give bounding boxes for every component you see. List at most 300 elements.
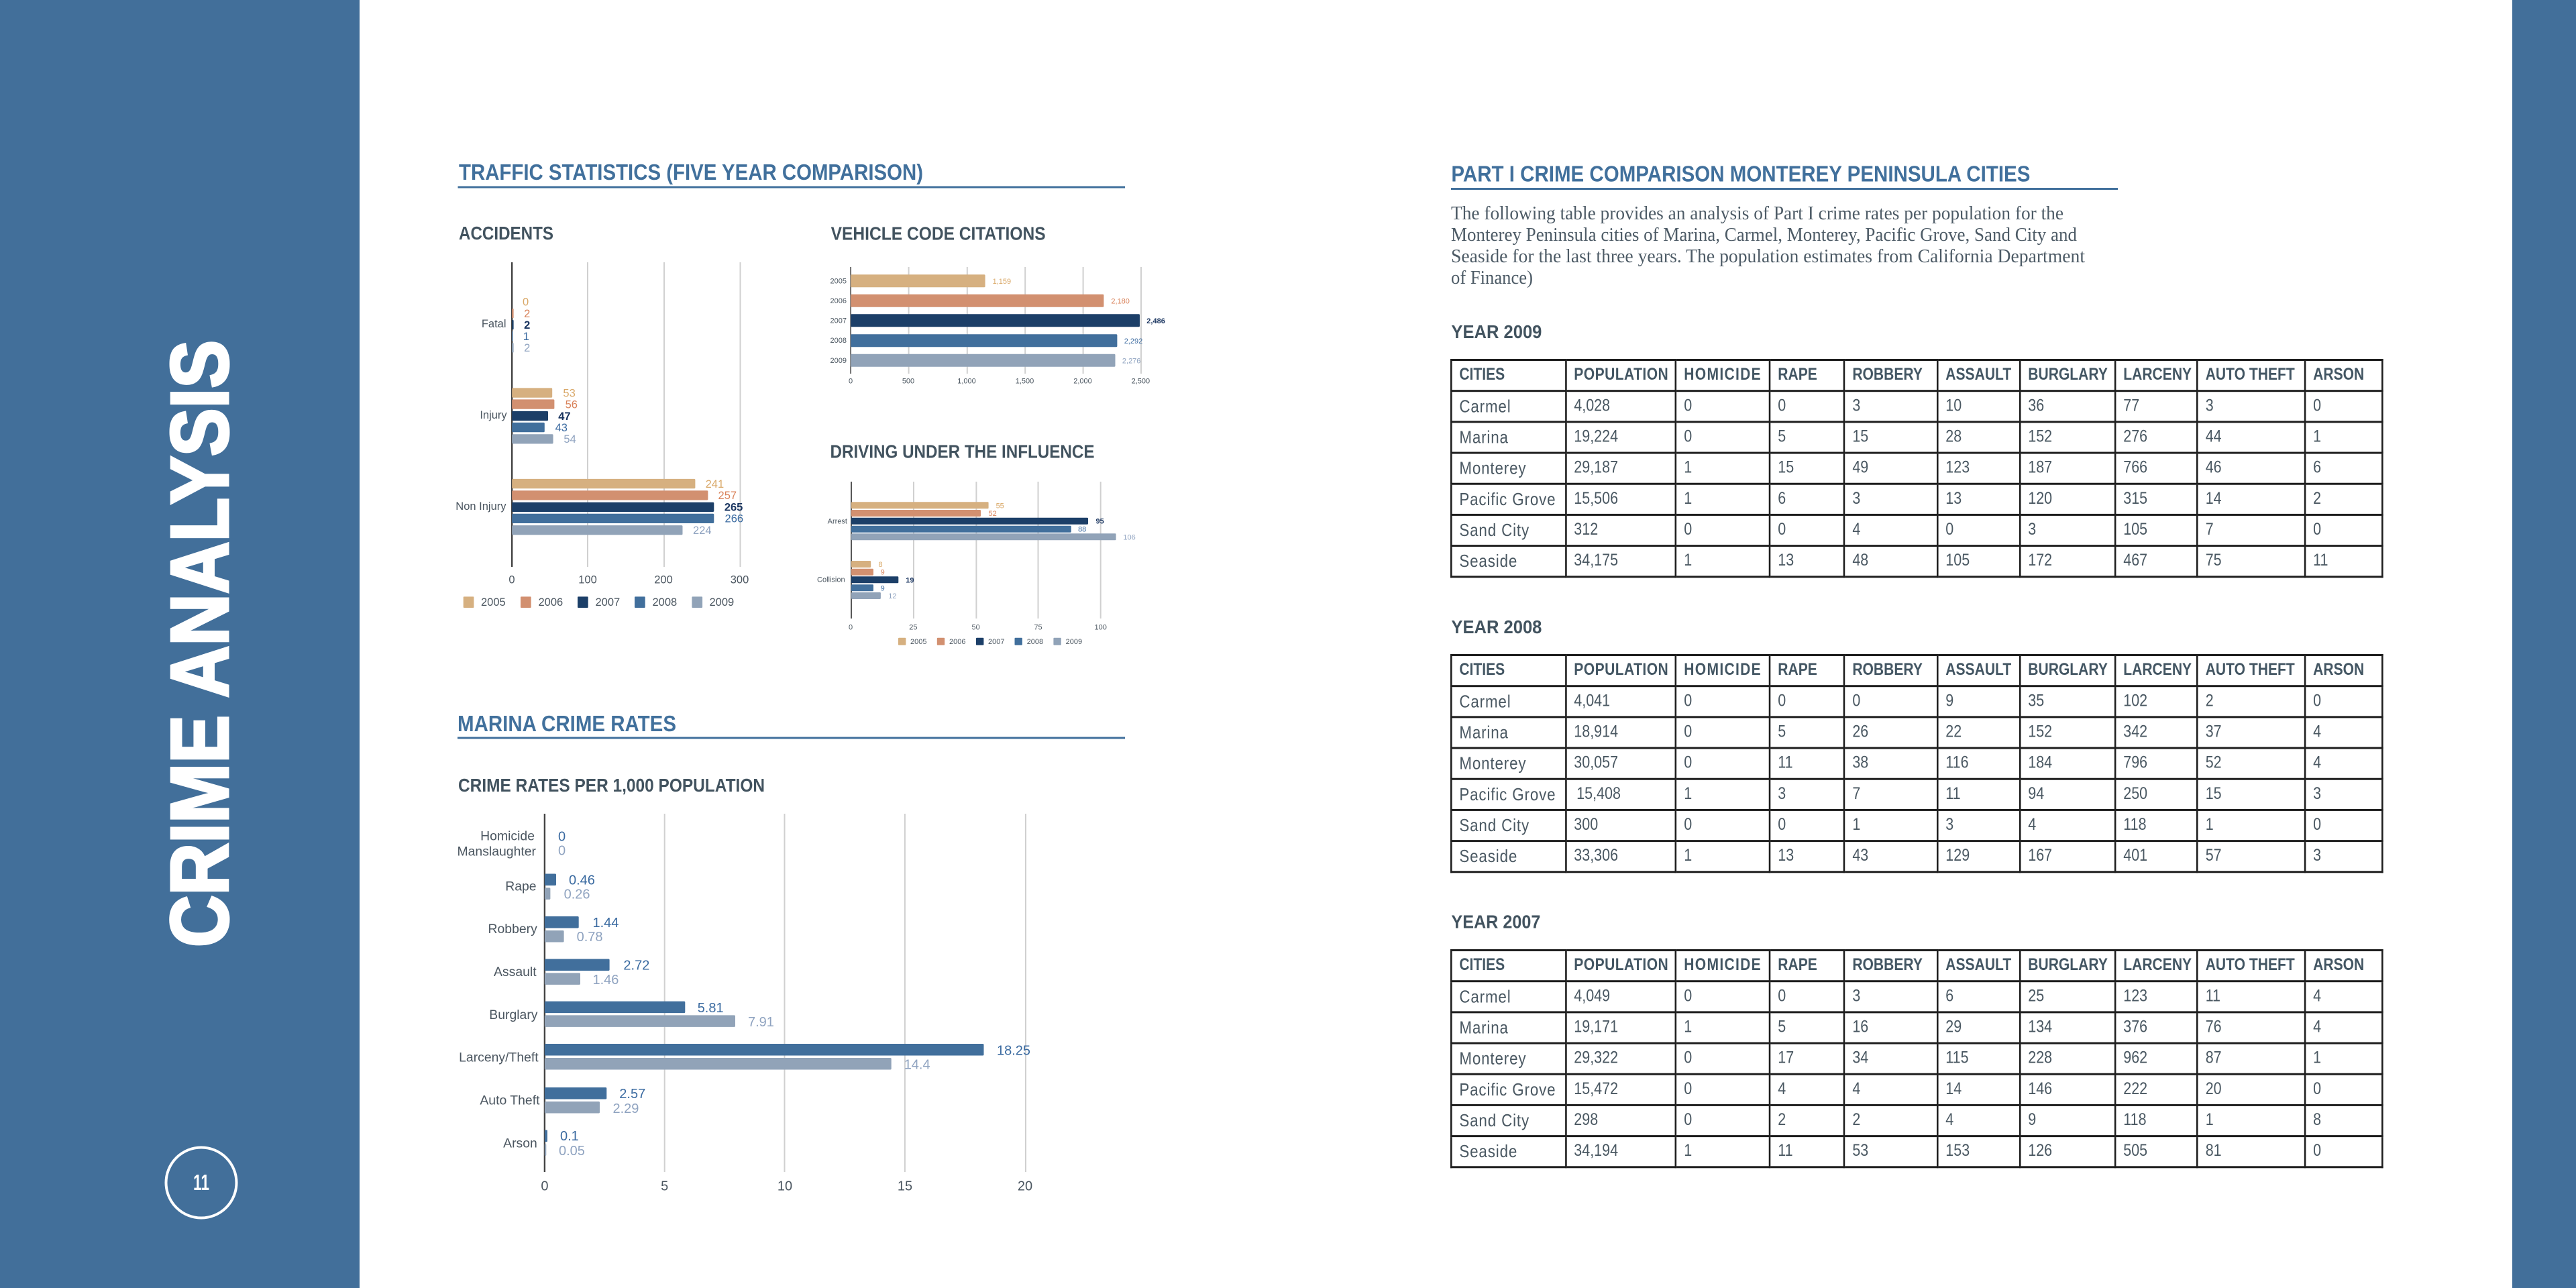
table: year 2008: LARCENY: [2123, 661, 2192, 680]
value labels: 2,486: [1146, 317, 1165, 325]
table: year 2009: 44: [2205, 427, 2221, 446]
table: year 2008: 0: [1852, 691, 1860, 710]
table: year 2007: [1450, 949, 2383, 1169]
table: year 2008: 152: [2028, 722, 2052, 741]
table: year 2007: 1: [1684, 1141, 1692, 1160]
value labels: 2.72: [623, 958, 649, 973]
value labels: 12: [888, 592, 897, 600]
value labels: 88: [1078, 526, 1086, 534]
value labels: 265: [724, 502, 743, 514]
table: year 2008: 3: [2313, 846, 2321, 865]
legend: 2005: [910, 638, 926, 646]
table: year 2009: BURGLARY: [2028, 366, 2108, 384]
table: year 2007: 76: [2205, 1017, 2221, 1036]
table: year 2008: 52: [2205, 753, 2221, 772]
table: year 2007: 6: [1945, 986, 1953, 1005]
table: year 2008: 94: [2028, 784, 2044, 803]
table: year 2008: 9: [1945, 691, 1953, 710]
table: year 2008: 118: [2123, 815, 2146, 834]
category labels: Larceny/Theft: [459, 1051, 539, 1065]
table: year 2008: 5: [1778, 722, 1786, 741]
x axis ticks: 0: [541, 1179, 548, 1193]
x axis ticks: [849, 378, 1150, 386]
table: year 2008: 37: [2205, 722, 2221, 741]
table: year 2009: 48: [1852, 551, 1868, 570]
table: year 2008: 0: [1684, 753, 1692, 772]
table: year 2007: 222: [2123, 1079, 2147, 1098]
table: year 2008: 15: [2205, 784, 2221, 803]
value labels: 0.1: [560, 1129, 579, 1144]
table: year 2009: ROBBERY: [1852, 366, 1923, 384]
table: year 2007: 0: [1778, 986, 1786, 1005]
table: year 2009: 5: [1778, 427, 1786, 446]
table: year 2009: [1450, 359, 2383, 578]
x axis ticks: 15: [898, 1179, 912, 1193]
table: year 2008: 0: [1684, 722, 1692, 741]
category labels: Arson: [503, 1136, 537, 1150]
year labels: 2008: [830, 337, 847, 345]
table: year 2007: 9: [2028, 1110, 2036, 1129]
table: year 2007: 34: [1852, 1049, 1868, 1067]
heading: traffic statistics: TRAFFIC STATISTICS (FIVE YEAR COMPARISON): [459, 160, 923, 184]
table: year 2007: 81: [2205, 1141, 2221, 1160]
table: year 2007: 298: [1574, 1110, 1598, 1129]
table: year 2008: 116: [1945, 753, 1968, 772]
table: year 2009: ARSON: [2313, 366, 2364, 384]
value labels: 19: [906, 576, 914, 584]
value labels: 2: [524, 308, 530, 320]
legend: 2009: [1066, 638, 1082, 646]
table: year 2007: CITIES: [1459, 956, 1505, 974]
table: year 2007: 0: [1684, 1079, 1692, 1098]
table: year 2007: 0: [1684, 1110, 1692, 1129]
table: year 2008: BURGLARY: [2028, 661, 2108, 680]
table: year 2009: 105: [1945, 551, 1970, 570]
value labels: 18.25: [997, 1044, 1030, 1059]
x axis ticks: 1,000: [957, 378, 976, 386]
table: year 2008: 796: [2123, 753, 2147, 772]
intro paragraph: of Finance): [1451, 268, 1533, 288]
x axis ticks: [849, 623, 1107, 631]
value labels: 224: [693, 525, 712, 537]
category labels: [455, 318, 507, 513]
table: year 2009: 123: [1945, 458, 1970, 477]
table: year 2009: 312: [1574, 520, 1598, 539]
table: year 2007: POPULATION: [1574, 956, 1668, 974]
table: year 2009: RAPE: [1778, 366, 1817, 384]
2008-series bars: [545, 873, 983, 1142]
table: year 2008: 1: [2205, 815, 2213, 834]
category labels: Injury: [480, 409, 507, 421]
value labels: 266: [725, 513, 743, 525]
table: year 2008: 38: [1852, 753, 1868, 772]
table: year 2009: POPULATION: [1574, 366, 1668, 384]
table: year 2007: AUTO THEFT: [2205, 956, 2294, 974]
table: year 2009: 0: [1945, 520, 1953, 539]
table: year 2007: 2: [1852, 1110, 1860, 1129]
table: year 2008: 0: [1778, 691, 1786, 710]
table: year 2007: 0: [1684, 986, 1692, 1005]
table: year 2008: 4: [2028, 815, 2036, 834]
x axis ticks: 2,000: [1073, 378, 1092, 386]
bars: non injury: [512, 479, 714, 535]
intro paragraph: The following table provides an analysis of Part I crime rates per population for the: [1451, 203, 2063, 224]
table: year 2009: Sand City: [1459, 520, 1529, 540]
x axis ticks: 300: [731, 574, 749, 586]
table: year 2008: 43: [1852, 846, 1868, 865]
value labels: [878, 502, 1136, 600]
table: year 2008: 2: [2205, 691, 2213, 710]
table: year 2008: RAPE: [1778, 661, 1817, 680]
x axis ticks: 0: [849, 623, 853, 631]
table: year 2007: Seaside: [1459, 1141, 1517, 1161]
table: year 2008: ARSON: [2313, 661, 2364, 680]
table: year 2009: 120: [2028, 489, 2052, 508]
intro paragraph: [1451, 203, 2085, 288]
value labels: 0: [558, 829, 566, 844]
table: year 2009: 467: [2123, 551, 2147, 570]
table: year 2009: 0: [1684, 520, 1692, 539]
table: year 2007: 11: [2205, 986, 2220, 1005]
heading: year 2008: YEAR 2008: [1451, 616, 1542, 637]
category labels: Assault: [494, 965, 537, 979]
table: year 2009: 0: [2313, 520, 2321, 539]
table: year 2008: Marina: [1459, 722, 1509, 742]
table: year 2009: 4,028: [1574, 396, 1610, 415]
table: year 2007: 118: [2123, 1110, 2146, 1129]
bars: collision: [851, 561, 898, 599]
value labels: 5.81: [698, 1001, 724, 1016]
table: year 2008: 15,408: [1576, 784, 1621, 803]
heading: driving under the influence: DRIVING UNDER THE INFLUENCE: [830, 441, 1095, 462]
table: year 2008: Seaside: [1459, 846, 1517, 866]
year labels: 2007: [830, 317, 847, 325]
table: year 2008: 11: [1945, 784, 1960, 803]
table: year 2007: 123: [2123, 986, 2147, 1005]
heading: marina crime rates: MARINA CRIME RATES: [458, 711, 676, 736]
table: year 2008: 13: [1778, 846, 1794, 865]
value labels: 2,276: [1122, 357, 1140, 365]
value labels: 9: [881, 584, 885, 592]
legend: 2007: [988, 638, 1004, 646]
value labels: 2,180: [1111, 297, 1130, 305]
x axis ticks: 50: [971, 623, 980, 631]
table: year 2009: 11: [2313, 551, 2328, 570]
heading: year 2009: YEAR 2009: [1451, 321, 1542, 342]
legend: 2006: [538, 596, 563, 608]
table: year 2007: 4: [1852, 1079, 1860, 1098]
table: year 2007: 3: [1852, 986, 1860, 1005]
x axis ticks: 10: [777, 1179, 792, 1193]
table: year 2009: 10: [1945, 396, 1962, 415]
table: year 2009: Marina: [1459, 427, 1509, 447]
table: year 2009: 36: [2028, 396, 2044, 415]
table: year 2007: Sand City: [1459, 1110, 1529, 1130]
table: year 2009: 1: [1684, 458, 1692, 477]
legend: 2005: [481, 596, 506, 608]
table: year 2007: BURGLARY: [2028, 956, 2108, 974]
table: year 2008: 401: [2123, 846, 2147, 865]
table: year 2009: 0: [1684, 396, 1692, 415]
table: year 2007: 5: [1778, 1017, 1786, 1036]
table: year 2008: 3: [2313, 784, 2321, 803]
table: year 2009: 3: [2028, 520, 2036, 539]
table: year 2008: 0: [1684, 815, 1692, 834]
category labels: Homicide: [480, 828, 535, 843]
table: year 2009: 14: [2205, 489, 2221, 508]
table: year 2009: 6: [2313, 458, 2321, 477]
table: year 2007: 29,322: [1574, 1049, 1618, 1067]
table: year 2008: 0: [2313, 691, 2321, 710]
category labels: Manslaughter: [458, 845, 537, 859]
table: year 2009: 152: [2028, 427, 2052, 446]
x axis ticks: 0: [849, 378, 853, 386]
value labels: 2,292: [1124, 337, 1142, 345]
legend: [464, 596, 734, 608]
table: year 2007: 376: [2123, 1017, 2147, 1036]
table: year 2008: 7: [1852, 784, 1860, 803]
table: year 2009: 19,224: [1574, 427, 1618, 446]
table: year 2008: 342: [2123, 722, 2147, 741]
value labels: 0.26: [564, 887, 590, 902]
x axis ticks: 2,500: [1132, 378, 1150, 386]
year labels: 2006: [830, 297, 847, 305]
table: year 2007: 34,194: [1574, 1141, 1618, 1160]
table: year 2008: 30,057: [1574, 753, 1618, 772]
table: year 2009: 1: [1684, 489, 1692, 508]
x axis ticks: [541, 1179, 1032, 1193]
value labels: 0: [523, 296, 529, 308]
heading: part I crime comparison: PART I CRIME COMPARISON MONTEREY PENINSULA CITIES: [1451, 161, 2030, 186]
table: year 2008: 102: [2123, 691, 2147, 710]
table: year 2007: 0: [1684, 1049, 1692, 1067]
heading: year 2007: YEAR 2007: [1451, 911, 1540, 932]
table: year 2007: 153: [1945, 1141, 1970, 1160]
table: year 2007: 0: [2313, 1141, 2321, 1160]
value labels: 2: [524, 319, 530, 331]
table: year 2008: 3: [1778, 784, 1786, 803]
table: year 2008: AUTO THEFT: [2205, 661, 2294, 680]
table: year 2009: Carmel: [1459, 396, 1511, 416]
category labels: [458, 828, 540, 1150]
value labels: 43: [555, 422, 568, 434]
table: year 2009: 105: [2123, 520, 2147, 539]
bars: [851, 274, 1140, 367]
sidebar title: CRIME ANALYSIS: [154, 340, 246, 947]
value labels: 56: [566, 398, 578, 411]
table: year 2009: 3: [1852, 396, 1860, 415]
value labels: 54: [564, 433, 576, 445]
table: year 2009: 49: [1852, 458, 1868, 477]
table: year 2008: 33,306: [1574, 846, 1618, 865]
table: year 2007: 4,049: [1574, 986, 1610, 1005]
table: year 2007: 1: [2313, 1049, 2321, 1067]
table: year 2007: 11: [1778, 1141, 1792, 1160]
table: year 2007: ROBBERY: [1852, 956, 1923, 974]
heading: vehicle code citations: VEHICLE CODE CITATIONS: [831, 223, 1046, 244]
value labels: 241: [706, 478, 724, 490]
intro paragraph: Monterey Peninsula cities of Marina, Carmel, Monterey, Pacific Grove, Sand City and: [1451, 225, 2077, 246]
legend: 2008: [652, 596, 677, 608]
category labels: Burglary: [489, 1008, 538, 1022]
table: year 2009: 75: [2205, 551, 2221, 570]
table: year 2009: CITIES: [1459, 366, 1505, 384]
panel: right edge band: [2512, 0, 2576, 1288]
table: year 2009: 276: [2123, 427, 2147, 446]
table: year 2007: 2: [1778, 1110, 1786, 1129]
table: year 2007: Pacific Grove: [1459, 1079, 1556, 1099]
table: year 2007: Marina: [1459, 1017, 1509, 1037]
category labels: Auto Theft: [480, 1093, 540, 1108]
table: year 2007: 15,472: [1574, 1079, 1618, 1098]
table: year 2009: 15,506: [1574, 489, 1618, 508]
year labels: 2005: [830, 278, 847, 286]
value labels: 9: [881, 569, 885, 577]
category labels: Non Injury: [455, 500, 506, 513]
table: year 2009: 77: [2123, 396, 2139, 415]
table: year 2008: Monterey: [1459, 753, 1526, 773]
table: year 2009: 172: [2028, 551, 2052, 570]
category labels: Collision: [817, 576, 845, 584]
table: year 2008: 1: [1684, 784, 1692, 803]
bars: arrest: [851, 502, 1116, 540]
table: year 2008: Pacific Grove: [1459, 784, 1556, 804]
x axis ticks: 20: [1018, 1179, 1032, 1193]
value labels: 1: [523, 331, 529, 343]
bar chart: accidents: [455, 262, 749, 608]
value labels: [558, 829, 1030, 1159]
value labels: 106: [1123, 533, 1136, 541]
x axis ticks: 5: [661, 1179, 668, 1193]
legend: 2007: [596, 596, 620, 608]
panel: left sidebar: [0, 0, 360, 1288]
x axis ticks: 1,500: [1016, 378, 1034, 386]
intro paragraph: Seaside for the last three years. The population estimates from California Department: [1451, 246, 2085, 267]
value labels: 8: [878, 561, 883, 569]
value labels: 257: [718, 490, 737, 502]
category labels: Fatal: [482, 318, 506, 330]
table: year 2007: 4: [2313, 1017, 2321, 1036]
page number badge: 11: [193, 1170, 209, 1195]
table: year 2009: 13: [1945, 489, 1962, 508]
table: year 2007: 146: [2028, 1079, 2052, 1098]
table: year 2007: 17: [1778, 1049, 1794, 1067]
table: year 2008: 184: [2028, 753, 2052, 772]
table: year 2008: 4,041: [1574, 691, 1610, 710]
table: year 2008: 4: [2313, 722, 2321, 741]
table: year 2008: 26: [1852, 722, 1868, 741]
table: year 2009: LARCENY: [2123, 366, 2192, 384]
value labels: 1,159: [993, 278, 1011, 286]
table: year 2007: 4: [1945, 1110, 1953, 1129]
table: year 2007: 14: [1945, 1079, 1962, 1098]
x axis ticks: [508, 574, 749, 586]
value labels: 1.46: [593, 973, 619, 987]
table: year 2007: 16: [1852, 1017, 1868, 1036]
value labels: 2.29: [613, 1102, 639, 1116]
table: year 2008: 1: [1852, 815, 1860, 834]
value labels: 52: [988, 510, 997, 518]
x axis ticks: 25: [909, 623, 918, 631]
legend: 2009: [710, 596, 734, 608]
page number badge: [166, 1147, 236, 1218]
table: year 2009: 15: [1852, 427, 1868, 446]
bar chart: vehicle code citations: [830, 267, 1165, 386]
table: year 2007: Monterey: [1459, 1048, 1526, 1068]
table: year 2007: 8: [2313, 1110, 2321, 1129]
table: year 2008: 129: [1945, 846, 1970, 865]
table: year 2007: LARCENY: [2123, 956, 2192, 974]
table: year 2007: 53: [1852, 1141, 1868, 1160]
2009-series bars: [545, 888, 892, 1156]
table: year 2008: HOMICIDE: [1684, 661, 1762, 680]
table: year 2007: 0: [2313, 1079, 2321, 1098]
table: year 2007: Carmel: [1459, 986, 1511, 1006]
table: year 2008: POPULATION: [1574, 661, 1668, 680]
value labels: 7.91: [748, 1015, 774, 1030]
value labels: 53: [563, 387, 576, 399]
table: year 2009: Pacific Grove: [1459, 488, 1556, 509]
table: year 2008: 250: [2123, 784, 2147, 803]
year labels: [830, 278, 847, 365]
value labels: 47: [558, 411, 571, 423]
value labels: 0.46: [569, 873, 595, 888]
table: year 2009: 766: [2123, 458, 2147, 477]
table: year 2007: 134: [2028, 1017, 2052, 1036]
table: year 2009: 2: [2313, 489, 2321, 508]
category labels: Robbery: [488, 922, 537, 936]
table: year 2009: AUTO THEFT: [2205, 366, 2294, 384]
x axis ticks: 200: [654, 574, 673, 586]
table: year 2007: ARSON: [2313, 956, 2364, 974]
bar chart: crime rates per 1,000 population: [458, 814, 1032, 1193]
table: year 2008: 35: [2028, 691, 2044, 710]
table: year 2009: ASSAULT: [1945, 366, 2011, 384]
table: year 2007: 20: [2205, 1079, 2221, 1098]
table: year 2007: RAPE: [1778, 956, 1817, 974]
value labels: 2.57: [619, 1087, 645, 1102]
table: year 2008: 22: [1945, 722, 1962, 741]
table: year 2007: 19,171: [1574, 1017, 1618, 1036]
table: year 2009: 15: [1778, 458, 1794, 477]
table: year 2009: 29,187: [1574, 458, 1618, 477]
table: year 2007: ASSAULT: [1945, 956, 2011, 974]
heading: crime rates per 1,000 population: CRIME RATES PER 1,000 POPULATION: [458, 775, 765, 796]
table: year 2008: ROBBERY: [1852, 661, 1923, 680]
table: year 2007: 29: [1945, 1017, 1962, 1036]
table: year 2007: 115: [1945, 1049, 1968, 1067]
table: year 2008: 1: [1684, 846, 1692, 865]
table: year 2009: Seaside: [1459, 551, 1517, 571]
table: year 2008: Carmel: [1459, 691, 1511, 711]
table: year 2009: 0: [1778, 520, 1786, 539]
value labels: 0: [558, 844, 566, 859]
table: year 2007: 505: [2123, 1141, 2147, 1160]
table: year 2009: HOMICIDE: [1684, 366, 1762, 384]
table: year 2009: 4: [1852, 520, 1860, 539]
x axis ticks: 100: [1095, 623, 1107, 631]
table: year 2008: ASSAULT: [1945, 661, 2011, 680]
table: year 2007: 1: [1684, 1017, 1692, 1036]
category labels: [817, 517, 847, 584]
table: year 2009: 187: [2028, 458, 2052, 477]
x axis ticks: 0: [508, 574, 515, 586]
year labels: 2009: [830, 357, 847, 365]
table: year 2009: 46: [2205, 458, 2221, 477]
x axis ticks: 500: [902, 378, 914, 386]
value labels: [993, 278, 1165, 365]
table: year 2008: 11: [1778, 753, 1792, 772]
